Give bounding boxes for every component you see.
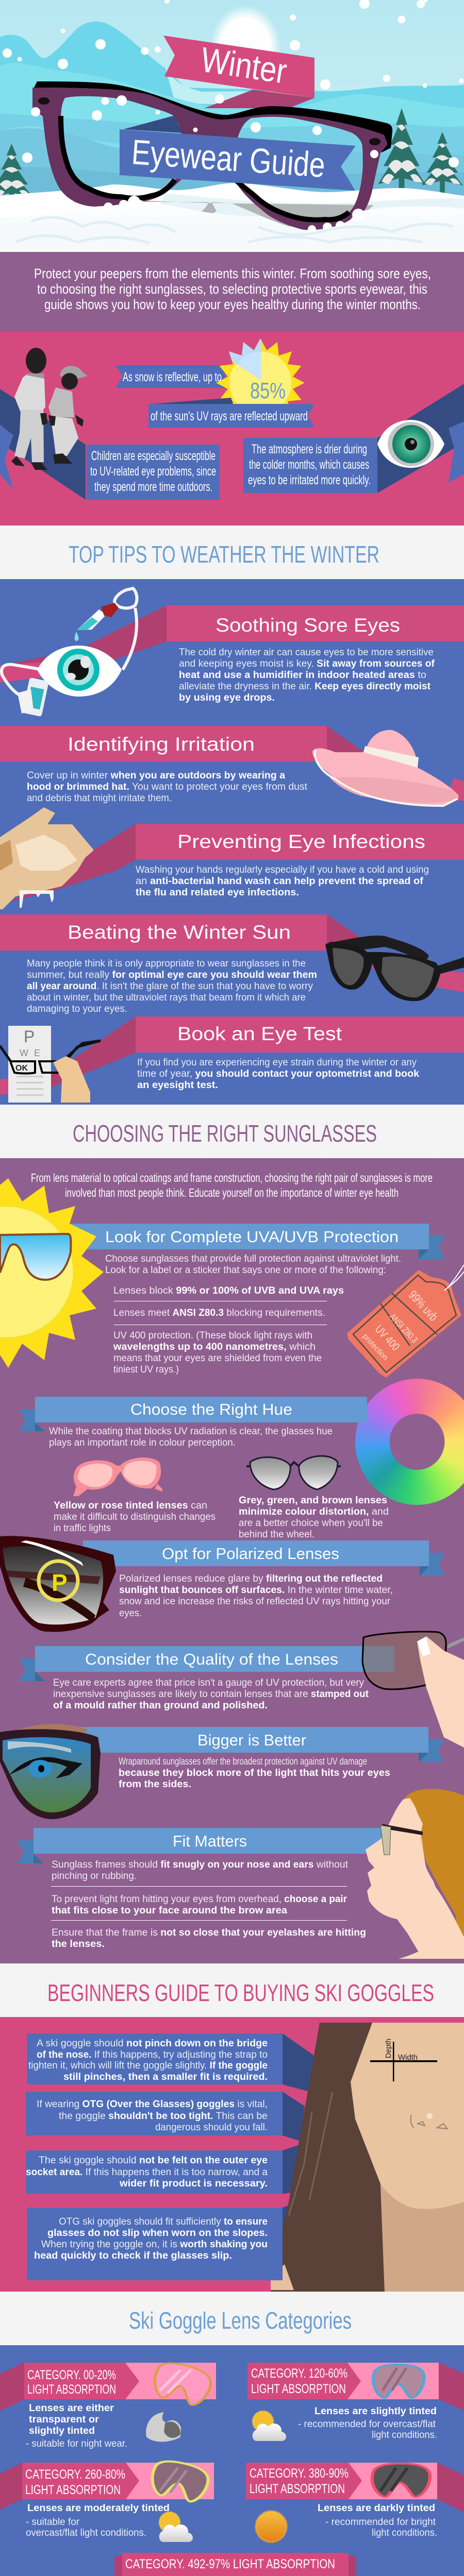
box: outer socket — [26, 2150, 283, 2194]
box: children: Children are especially susceptible — [91, 449, 216, 463]
icon: rainbow ring — [355, 1379, 464, 1505]
ribbon text: as snow is reflective: As snow is reflective, up to — [123, 370, 222, 384]
tip: book an eye test — [0, 1016, 464, 1095]
category 0: slightly tinted — [29, 2426, 95, 2436]
silhouettes: woman and child — [11, 348, 88, 470]
banner: Eyewear Guide: Eyewear Guide — [130, 132, 326, 185]
illustration: woman face with measure — [271, 2023, 464, 2292]
text: tinted lens choices: in traffic lights — [54, 1523, 111, 1534]
banner: look for complete protection: Look for Complete UVA/UVB Protection — [105, 1228, 399, 1246]
category 3: LIGHT ABSORPTION — [250, 2482, 345, 2496]
facts panel ribbons — [0, 384, 464, 500]
scalloped edge: tips to sunglasses heading — [0, 1105, 464, 1110]
category 3: Lenses are darkly tinted — [318, 2503, 435, 2514]
box: outer socket: wider fit product is necessary. — [119, 2178, 268, 2189]
text: tinted lens choices: make it difficult to distinguish changes — [54, 1512, 216, 1522]
heading: ski goggle lens categories: Ski Goggle Lens Categories — [129, 2307, 352, 2334]
category 0 — [0, 2359, 216, 2449]
box: children: to UV-related eye problems, since — [90, 464, 216, 479]
text: tinted lens choices: Grey, green, and brown lenses — [239, 1495, 387, 1506]
tip: soothing sore eyes — [0, 605, 464, 703]
banner: Winter — [163, 36, 314, 108]
icon: eye with dropper — [2, 588, 137, 717]
tip: soothing sore eyes: The cold dry winter air can cause eyes to be more sensitive — [179, 647, 434, 658]
icon: price tag: 99% uvb — [406, 1288, 440, 1324]
ribbon: of the sun's UV rays — [148, 398, 314, 428]
text: uv protection list: Choose sunglasses that provide full protection against ultraviolet light. — [105, 1253, 401, 1264]
box: atmosphere: The atmosphere is drier during — [252, 442, 367, 456]
scalloped edge: ski section to categories heading — [0, 2292, 464, 2297]
banner: bigger is better — [69, 1727, 444, 1790]
icon: eye chart with glasses — [0, 1026, 101, 1103]
category 1: CATEGORY. 120-60% — [251, 2366, 347, 2381]
text: uv protection list: Look for a label or a sticker that says one or more of the following: — [105, 1265, 386, 1276]
banner: consider quality of lenses: Consider the Quality of the Lenses — [85, 1650, 338, 1668]
category 2: overcast/flat light conditions. — [26, 2528, 146, 2538]
box: pinch: still pinches, then a smaller fit is required. — [63, 2072, 268, 2082]
glasses — [32, 81, 392, 231]
icon: sun with shades — [0, 1178, 104, 1368]
banner: consider quality of lenses — [19, 1646, 394, 1711]
icon: black sunglasses — [325, 936, 464, 1001]
icon: polarized lens — [0, 1536, 116, 1632]
tip: beating the winter sun: summer, but really for optimal eye care you should wear them — [27, 970, 317, 980]
category 2: - suitable for — [26, 2517, 80, 2528]
illustration: woman face with measure: Depth — [384, 2039, 393, 2058]
icon: green eye — [377, 420, 444, 468]
icon: washing hands — [0, 807, 94, 909]
box: shaking head — [27, 2208, 283, 2280]
stat: 85% sun — [216, 338, 305, 404]
icon: polarized lens: P — [52, 1569, 68, 1596]
category 3: - recommended for bright — [325, 2517, 436, 2528]
icon: pink hat — [312, 730, 459, 806]
tip: preventing eye infections — [10, 824, 464, 902]
icon: aviator glasses — [246, 1456, 341, 1489]
banner: Winter: Winter — [198, 40, 289, 91]
tip: identifying irritation — [0, 726, 464, 804]
box: pinch — [27, 2033, 283, 2084]
category 0: Lenses are either — [29, 2403, 114, 2414]
banner: fit matters: To prevent light from hitting your eyes from overhead, choose a pair — [52, 1894, 347, 1905]
ribbon: of the sun's UV rays: of the sun's UV rays are reflected upward — [151, 409, 308, 423]
category 3: light conditions. — [372, 2528, 437, 2538]
scalloped edge: heading to sunglasses section — [0, 1158, 464, 1164]
banner: choose the right hue: Choose the Right Hue — [130, 1400, 292, 1418]
icon: price tag: ANSI Z80.3 — [388, 1312, 420, 1345]
tip: book an eye test: an eyesight test. — [137, 1080, 218, 1091]
text: uv protection list: Lenses block 99% or 100% of UVB and UVA rays — [113, 1285, 344, 1296]
box: pinch: of the nose. If this happens, try adjusting the strap to — [37, 2049, 268, 2060]
tip: preventing eye infections: Preventing Eye Infections — [177, 831, 425, 852]
category 3: CATEGORY. 380-90% — [250, 2466, 349, 2481]
icon: eye chart with glasses: P — [24, 1027, 35, 1046]
text: tinted lens choices: are a better choice when you'll be — [239, 1518, 383, 1529]
stat number 85%: 85% — [250, 378, 286, 403]
tip: soothing sore eyes: and keeping eyes moist is key. Sit away from sources of — [179, 658, 435, 669]
category 4: CATEGORY. 492-97% LIGHT ABSORPTION — [125, 2557, 335, 2571]
box: children: they spend more time outdoors. — [94, 480, 212, 494]
banner: opt for polarized lenses — [83, 1540, 445, 1619]
box: pinch: tighten it, which will lift the goggle slightly. If the goggle — [28, 2060, 268, 2071]
trees — [0, 108, 463, 206]
banner: opt for polarized lenses: snow and ice increase the risks of reflected UV rays hitting your — [119, 1596, 391, 1607]
tip: beating the winter sun: Many people think it is only appropriate to wear sunglasses in the — [27, 958, 306, 969]
category 1: Lenses are slightly tinted — [314, 2406, 437, 2417]
banner: bigger is better: from the sides. — [119, 1779, 191, 1790]
text: uv protection list: UV 400 protection. (These block light rays with — [113, 1330, 312, 1341]
icon: eye chart with glasses: E — [34, 1048, 40, 1058]
banner: choose the right hue: While the coating that blocks UV radiation is clear, the glasses hue — [49, 1426, 333, 1437]
tip: soothing sore eyes: Soothing Sore Eyes — [216, 615, 400, 636]
icon: rose glasses — [73, 1458, 162, 1496]
category 3 — [246, 2463, 464, 2542]
banner: Eyewear Guide — [120, 115, 356, 191]
banner: look for complete protection — [71, 1224, 445, 1259]
category 2: LIGHT ABSORPTION — [25, 2483, 121, 2497]
tip: beating the winter sun: all year around. It isn't the glare of the sun that you have to worry — [27, 981, 313, 992]
icon: eye chart with glasses: W — [20, 1048, 28, 1058]
category 2: CATEGORY. 260-80% — [25, 2467, 125, 2482]
tip: book an eye test: time of year, you should contact your optometrist and book — [137, 1069, 419, 1079]
tip: book an eye test: If you find you are experiencing eye strain during the winter or any — [137, 1057, 417, 1068]
box: OTG — [26, 2092, 283, 2136]
box: OTG: the goggle shouldn't be too tight. This can be — [59, 2111, 268, 2122]
text: uv protection list — [105, 1253, 401, 1375]
text: tinted lens choices: Yellow or rose tinted lenses can — [54, 1500, 207, 1511]
category 0: transparent or — [29, 2414, 100, 2425]
banner: fit matters: Fit Matters — [173, 1832, 247, 1850]
icon: eye chart with glasses: OK — [15, 1064, 28, 1073]
illustration: woman in profile — [366, 1789, 464, 1959]
tip: book an eye test: Book an Eye Test — [177, 1023, 342, 1044]
box: OTG: dangerous should you fall. — [155, 2122, 268, 2133]
box: outer socket: The ski goggle should not be felt on the outer eye — [39, 2155, 268, 2166]
tip: identifying irritation: Identifying Irritation — [68, 734, 255, 755]
ribbon: as snow is reflective (shape) — [115, 365, 225, 388]
category 1: - recommended for overcast/flat — [298, 2419, 436, 2430]
category 4 — [114, 2553, 356, 2576]
scalloped edge: heading to ski section — [0, 2017, 464, 2023]
tip: beating the winter sun: Beating the Winter Sun — [68, 922, 291, 943]
box: shaking head: head quickly to check if the glasses slip. — [34, 2250, 232, 2261]
category 2 — [0, 2458, 214, 2542]
banner: choose the right hue: plays an important role in colour perception. — [49, 1437, 236, 1448]
tip: preventing eye infections: Washing your hands regularly especially if you have a cold and using — [136, 865, 429, 875]
banner: consider quality of lenses: Eye care experts agree that price isn't a gauge of UV protection, but very — [53, 1677, 364, 1688]
tip: identifying irritation: hood or brimmed hat. You want to protect your eyes from dust — [27, 782, 308, 792]
banner: fit matters: that fits close to your face around the brow area — [52, 1905, 287, 1916]
box: children — [87, 445, 220, 500]
ribbon folds behind boxes — [283, 2033, 315, 2280]
scalloped edge: intro to facts — [0, 332, 464, 337]
category 1: light conditions. — [372, 2430, 437, 2441]
box: shaking head: OTG ski goggles should fit sufficiently to ensure — [59, 2216, 268, 2227]
box: outer socket: socket area. If this happens then it is too narrow, and a — [26, 2167, 268, 2178]
banner: fit matters: pinching or rubbing. — [52, 1871, 137, 1882]
tip: preventing eye infections: an anti-bacterial hand wash can help prevent the spread of — [136, 876, 424, 887]
box: atmosphere — [243, 438, 377, 493]
text: tinted lens choices: minimize colour distortion, and — [239, 1506, 389, 1517]
icon: hand holding lens — [362, 1632, 464, 1748]
tip: soothing sore eyes: heat and use a humidifier in indoor heated areas to — [179, 670, 426, 681]
text: tinted lens choices: behind the wheel. — [239, 1529, 314, 1540]
foreground snow — [0, 196, 464, 252]
banner: fit matters — [18, 1828, 382, 1950]
icon: price tag — [347, 1265, 464, 1378]
box: shaking head: glasses do not slip when worn on the slopes. — [47, 2228, 268, 2239]
banner: opt for polarized lenses: eyes. — [119, 1608, 142, 1619]
ground shading and glasses shadow — [73, 193, 464, 227]
category 0: CATEGORY. 00-20% — [27, 2368, 116, 2382]
banner: consider quality of lenses: of a mould rather than ground and polished. — [53, 1700, 268, 1711]
icon: lens with eye — [0, 1724, 101, 1819]
text: uv protection list: tiniest UV rays.) — [113, 1364, 179, 1375]
category 1: LIGHT ABSORPTION — [251, 2382, 346, 2396]
icon: price tag: UV 400 — [372, 1323, 402, 1353]
box: atmosphere: the colder months, which causes — [249, 457, 369, 472]
scalloped edge: heading to tips — [0, 579, 464, 585]
banner: fit matters: Sunglass frames should fit snugly on your nose and ears without — [52, 1859, 349, 1870]
category 0: - suitable for night wear. — [26, 2438, 127, 2449]
banner: fit matters: the lenses. — [52, 1939, 105, 1950]
banner: fit matters: Ensure that the frame is not so close that your eyelashes are hitting — [52, 1927, 366, 1938]
snow ground — [0, 183, 464, 252]
banner: bigger is better: because they block more of the light that hits your eyes — [119, 1768, 390, 1778]
sunglasses intro — [31, 1171, 433, 1199]
tip: preventing eye infections: the flu and related eye infections. — [136, 887, 299, 898]
hero winter scene — [0, 5, 464, 206]
scalloped edge: facts to tips heading — [0, 526, 464, 531]
tip: beating the winter sun: damaging to your eyes. — [27, 1004, 127, 1014]
banner: choose the right hue — [19, 1397, 367, 1448]
banner: bigger is better: Bigger is Better — [197, 1731, 306, 1749]
scalloped edge: hero to intro — [0, 252, 464, 258]
intro text — [34, 266, 431, 312]
banner: opt for polarized lenses: Polarized lenses reduce glare by filtering out the reflected — [119, 1573, 383, 1584]
tip: identifying irritation: and debris that might irritate them. — [27, 793, 172, 804]
box: atmosphere: eyes to be irritated more quickly. — [248, 473, 371, 487]
category 2: Lenses are moderately tinted — [27, 2503, 170, 2514]
banner: opt for polarized lenses: Opt for Polarized Lenses — [162, 1545, 339, 1563]
tip: soothing sore eyes: alleviate the dryness in the air. Keep eyes directly moist — [179, 681, 431, 692]
tip: soothing sore eyes: by using eye drops. — [179, 692, 275, 703]
icon: price tag: protection — [361, 1332, 390, 1362]
category 1 — [247, 2363, 464, 2441]
box: shaking head: When trying the goggle on, it is worth shaking you — [41, 2239, 268, 2250]
scalloped edge: sunglasses to ski heading — [0, 1963, 464, 1969]
box: pinch: A ski goggle should not pinch down on the bridge — [37, 2038, 268, 2049]
scalloped edge: heading to categories — [0, 2345, 464, 2351]
text: uv protection list: Lenses meet ANSI Z80.3 blocking requirements. — [113, 1308, 325, 1318]
tip: identifying irritation: Cover up in winter when you are outdoors by wearing a — [27, 770, 285, 781]
text: uv protection list: means that your eyes are shielded from even the — [113, 1353, 322, 1364]
tip: beating the winter sun — [0, 914, 464, 1014]
banner: consider quality of lenses: inexpensive sunglasses are likely to contain lenses that are stamped out — [53, 1689, 369, 1700]
tip: beating the winter sun: about in winter, but the ultraviolet rays that beam from it which are — [27, 992, 306, 1003]
text: uv protection list: wavelengths up to 400 nanometres, which — [113, 1342, 316, 1352]
banner: bigger is better: Wraparound sunglasses offer the broadest protection against UV damage — [119, 1756, 367, 1767]
illustration: woman face with measure: Width — [398, 2053, 418, 2062]
category 0: LIGHT ABSORPTION — [27, 2382, 116, 2397]
banner: opt for polarized lenses: sunlight that bounces off surfaces. In the winter time water, — [119, 1585, 393, 1596]
box: OTG: If wearing OTG (Over the Glasses) goggles is vital, — [37, 2099, 268, 2110]
snowflakes — [3, 0, 464, 167]
text: tinted lens choices — [54, 1495, 389, 1540]
